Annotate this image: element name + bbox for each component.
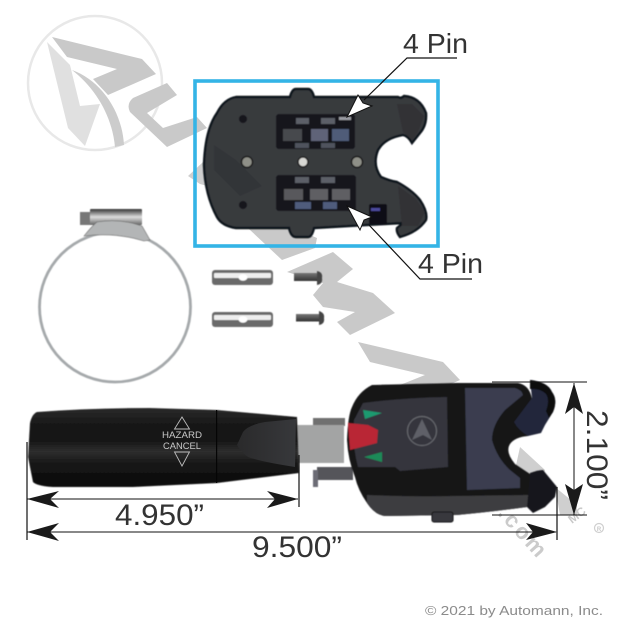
- watermark: Automann logo and diagonal wordmark: R: [597, 527, 602, 533]
- label: bottom 4 Pin with arrow: 4 Pin: [418, 248, 483, 279]
- indicator lights: [348, 410, 382, 462]
- dimension: 4.950 inches: [27, 442, 299, 540]
- right clips: [514, 380, 557, 513]
- watermark: Automann logo and diagonal wordmark: [28, 16, 604, 562]
- hose clamp: [40, 209, 190, 382]
- bottom tab: [432, 512, 453, 522]
- label: top 4 Pin with arrow: 4 Pin: [403, 28, 468, 59]
- dimension: 2.100 inches: 2.100”: [580, 410, 613, 500]
- dimension: 9.500 inches: 9.500”: [252, 531, 342, 564]
- connector plate photo: [204, 89, 426, 237]
- dimension: 9.500 inches: [27, 487, 557, 564]
- panel: highlighted connector plate frame: [195, 81, 438, 246]
- dimension: 4.950 inches: 4.950”: [115, 499, 204, 532]
- label: bottom 4 Pin with arrow: [347, 206, 483, 279]
- small screws: [294, 271, 324, 325]
- hazard cancel marking: HAZARD: [162, 430, 202, 441]
- plate screws and holes: [239, 115, 387, 224]
- watermark: Automann logo and diagonal wordmark: .com: [493, 501, 552, 562]
- upper 4-pin connector: [276, 114, 355, 149]
- hazard cancel marking: CANCEL: [163, 441, 202, 452]
- watermark: Automann logo and diagonal wordmark: MC: [565, 504, 589, 526]
- switch handle: [28, 408, 299, 487]
- dimension: 2.100 inches: [492, 382, 613, 515]
- roll pins: [212, 270, 273, 327]
- hazard cancel marking: [162, 417, 202, 466]
- copyright notice: © 2021 by Automann, Inc.: [425, 603, 603, 618]
- label: top 4 Pin with arrow: [347, 28, 468, 117]
- embossed logo: [408, 416, 436, 446]
- metal stem: [297, 418, 353, 487]
- lower 4-pin connector: [276, 175, 356, 211]
- switch body with connector housing: [347, 380, 557, 522]
